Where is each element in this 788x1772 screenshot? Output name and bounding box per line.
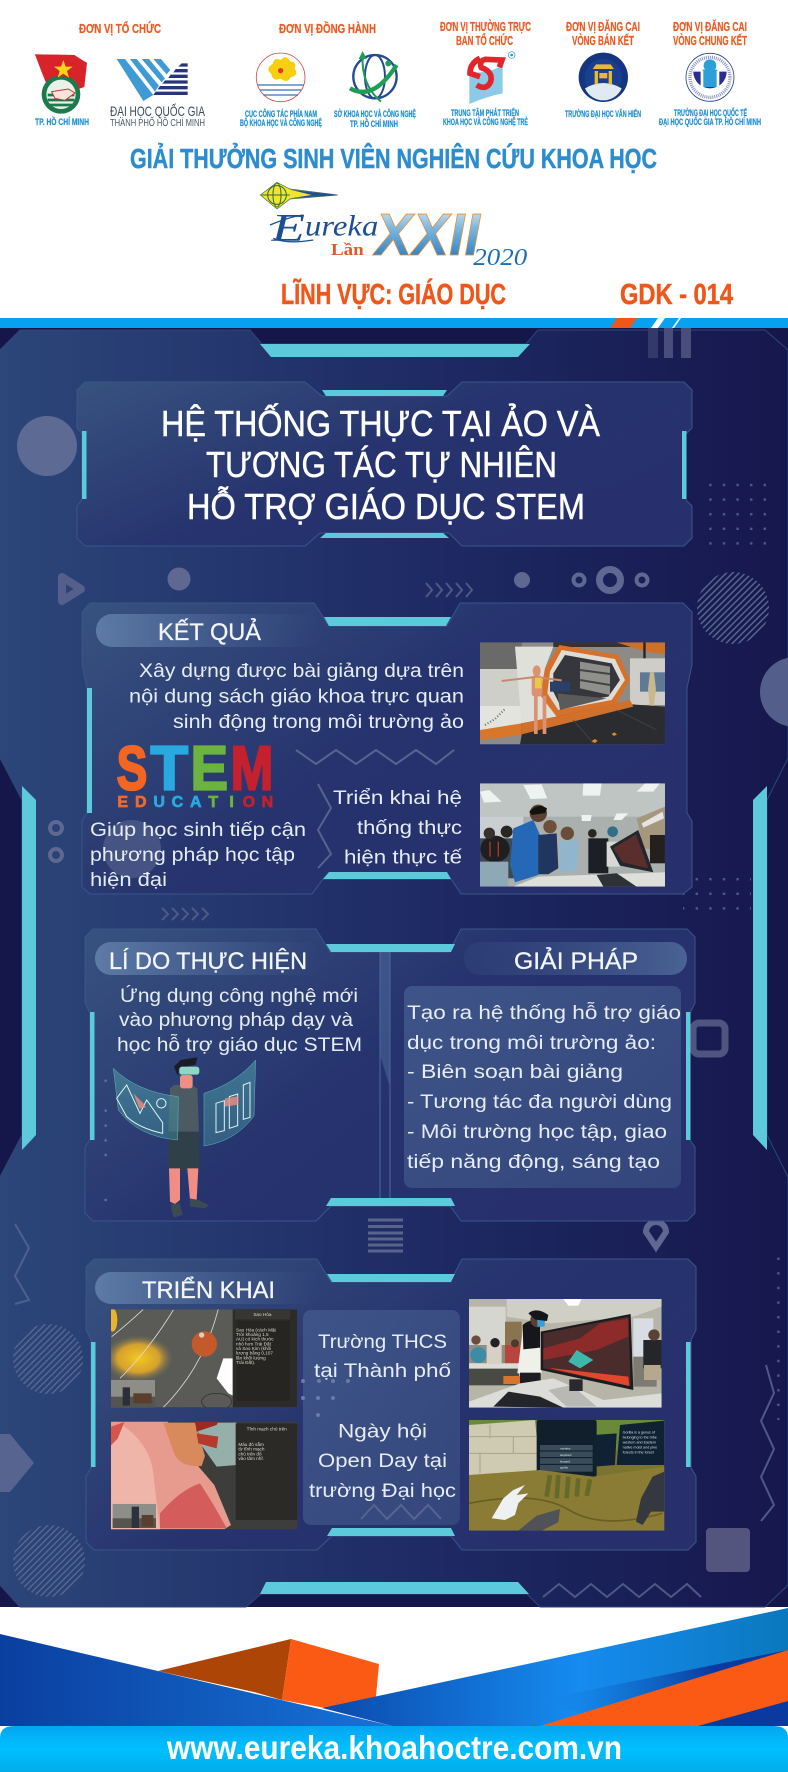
text: lessons: Xây dựng được bài giảng dựa trên xyxy=(139,661,464,682)
photo: AR solar system: và Sao Kim (khối xyxy=(236,1346,271,1351)
text: secondary school: Trường THCS xyxy=(318,1332,447,1353)
text: lessons: nội dung sách giáo khoa trực quan xyxy=(129,686,464,708)
stem education logo: N xyxy=(262,794,273,811)
ribbon: blue right xyxy=(322,1608,788,1726)
heading: organising unit: ĐƠN VỊ TỔ CHỨC xyxy=(79,21,161,36)
box: solution: - Môi trường học tập, giao xyxy=(407,1122,667,1143)
text: open day: trường Đại học xyxy=(309,1481,456,1502)
blue header band xyxy=(0,318,788,328)
logo: international university xyxy=(686,53,734,101)
stem education logo: I xyxy=(229,794,234,811)
photo: AR solar system: AU) có kích thước xyxy=(236,1337,274,1342)
photo: student with headset xyxy=(469,1299,662,1408)
logo: national university xyxy=(117,59,188,101)
heading pill: reason: LÍ DO THỰC HIỆN xyxy=(109,948,307,975)
chevron divider xyxy=(318,784,331,868)
logo: Eureka XXII 2020: E xyxy=(270,205,305,249)
text: reason: Ứng dụng công nghệ mới xyxy=(120,985,358,1007)
photo: AR heart: Tĩnh mạch chủ trên xyxy=(247,1426,287,1432)
logo: youth union xyxy=(35,54,87,114)
label: young science centre: TRUNG TÂM PHÁT TRIỂN xyxy=(451,107,519,118)
photo: AR heart: Máu đỏ sẫm xyxy=(238,1441,264,1447)
panel: reason and solution xyxy=(85,929,695,1221)
heading pill: solution: GIẢI PHÁP xyxy=(514,946,638,975)
text: deployment: Triển khai hệ xyxy=(333,788,462,809)
panel: results xyxy=(82,603,692,894)
photo: AR heart: chủ trên đổ xyxy=(238,1450,262,1456)
label: national university name xyxy=(110,102,205,129)
box: solution xyxy=(404,986,681,1188)
photo: AR heart xyxy=(111,1422,297,1530)
stem education logo: E xyxy=(117,794,128,811)
heading: final host xyxy=(673,19,747,48)
logo: Eureka XXII 2020 xyxy=(260,182,527,271)
heading: semi final host: ĐƠN VỊ ĐĂNG CAI xyxy=(566,19,640,34)
photo: VR jungle lesson: monkey xyxy=(560,1446,571,1450)
ribbon: blue left xyxy=(0,1634,392,1726)
logo: Eureka XXII 2020: ureka xyxy=(305,211,378,243)
logo: Eureka XXII 2020: XXII xyxy=(372,201,481,268)
stem education logo xyxy=(117,734,273,811)
stem education logo: M xyxy=(231,734,273,803)
box: solution: dục trong môi trường ảo: xyxy=(407,1033,656,1054)
heading pill: results xyxy=(96,614,322,647)
text: open day: Ngày hội xyxy=(338,1422,427,1442)
stem education logo: S xyxy=(117,734,147,803)
box: solution: Tạo ra hệ thống hỗ trợ giáo xyxy=(407,1002,681,1024)
title line 1: HỆ THỐNG THỰC TẠI ẢO VÀ xyxy=(161,402,600,444)
logo: young science centre xyxy=(469,52,515,104)
decorative shapes xyxy=(0,328,788,1597)
ribbon: dark fold xyxy=(540,1650,788,1726)
photo: AR solar system: nhỏ hơn Trái Đất xyxy=(236,1340,272,1346)
label: Van Hien university: TRƯỜNG ĐẠI HỌC VĂN HIẾN xyxy=(565,108,641,119)
text: deployment: hiện thực tế xyxy=(344,848,463,868)
photo: VR jungle lesson: Gorilla is a genus of xyxy=(623,1430,656,1434)
photo: AR solar system: lượng bằng 0,107 xyxy=(236,1350,273,1356)
text: students access xyxy=(90,820,306,891)
panel: deployment xyxy=(86,1259,696,1550)
heading pill: results: KẾT QUẢ xyxy=(158,617,261,646)
cyan left bar xyxy=(22,786,36,1150)
website bar xyxy=(0,1726,788,1772)
bottom ribbon graphic xyxy=(0,1608,788,1726)
logo: southern science bureau xyxy=(256,53,305,102)
text: lessons: sinh động trong môi trường ảo xyxy=(173,712,464,733)
label: southern science bureau xyxy=(240,108,322,128)
heading pill: deployment xyxy=(95,1272,322,1304)
label: young science centre xyxy=(443,107,528,127)
heading pill: solution xyxy=(464,942,687,975)
stem education logo: U xyxy=(153,794,165,811)
heading: standing unit: BAN TỔ CHỨC xyxy=(456,33,513,48)
text: students access: hiện đại xyxy=(90,870,167,891)
cyan right bar xyxy=(753,786,767,1150)
photo: VR jungle lesson xyxy=(469,1420,664,1531)
box: solution: - Tương tác đa người dùng xyxy=(407,1092,672,1113)
stem education logo: O xyxy=(243,794,255,811)
photo: AR heart: vào tâm nhĩ. xyxy=(238,1456,264,1461)
cyan top bar xyxy=(260,344,530,357)
label: young science centre: KHOA HỌC VÀ CÔNG NGHỆ TRẺ xyxy=(443,116,528,127)
photo: VR jungle lesson: western and Eastern xyxy=(623,1440,656,1444)
heading: partner unit: ĐƠN VỊ ĐỒNG HÀNH xyxy=(279,21,376,36)
text: reason: học hỗ trợ giáo dục STEM xyxy=(117,1034,362,1056)
stem education logo: T xyxy=(151,734,188,803)
photo: VR jungle lesson: elephant xyxy=(560,1453,572,1457)
panel: title xyxy=(77,382,692,546)
text: secondary school xyxy=(314,1332,452,1382)
photo: VR jungle lesson: leopard xyxy=(560,1460,570,1464)
text: open day xyxy=(309,1422,456,1502)
box: locations xyxy=(301,1310,460,1525)
text: open day: Open Day tại xyxy=(318,1451,447,1472)
photo: AR solar system xyxy=(103,1308,297,1410)
text: secondary school: tại Thành phố xyxy=(314,1361,452,1382)
project code: GDK - 014 xyxy=(620,279,733,311)
photo: AR solar system: lần khối lượng xyxy=(236,1355,266,1360)
heading: semi final host xyxy=(566,19,640,48)
stem education logo: D xyxy=(135,794,147,811)
photo: VR jungle lesson: native moist and pine xyxy=(623,1445,657,1449)
photo: AR heart: từ tĩnh mạch xyxy=(238,1447,265,1452)
heading: semi final host: VÒNG BÁN KẾT xyxy=(572,33,634,48)
photo: students in lab xyxy=(480,783,665,887)
heading pill: deployment: TRIỂN KHAI xyxy=(142,1276,275,1304)
stem education logo: E xyxy=(191,734,228,803)
logo: city science department xyxy=(350,51,397,102)
text: lessons xyxy=(129,661,464,733)
outer frame xyxy=(0,330,788,1607)
header: organisers and logos xyxy=(35,19,761,129)
label: city science department: TP. HỒ CHÍ MINH xyxy=(350,118,398,129)
cyan bottom bar xyxy=(260,1582,529,1594)
label: southern science bureau: CỤC CÔNG TÁC PHÍA NAM xyxy=(245,108,317,119)
heading: standing unit: ĐƠN VỊ THƯỜNG TRỰC xyxy=(440,19,531,34)
ribbon: orange right xyxy=(540,1650,788,1726)
box: solution: - Biên soạn bài giảng xyxy=(407,1062,623,1083)
text: deployment: thống thực xyxy=(357,818,462,839)
label: city science department: SỞ KHOA HỌC VÀ CÔNG NGHỆ xyxy=(334,108,416,119)
photo: VR jungle lesson: gorilla xyxy=(560,1466,568,1470)
stem education logo: A xyxy=(190,794,202,811)
zigzag xyxy=(296,750,454,764)
logo: Van Hien university xyxy=(579,53,628,102)
label: international university xyxy=(659,107,761,127)
ribbon: brown fold xyxy=(158,1639,291,1700)
label: southern science bureau: BỘ KHOA HỌC VÀ CÔNG NGHỆ xyxy=(240,117,322,128)
stem education logo: T xyxy=(208,794,218,811)
photo: AR solar system: Sao Hỏa xyxy=(253,1311,272,1317)
text: students access: phương pháp học tập xyxy=(90,845,295,866)
heading: standing unit xyxy=(440,19,531,48)
text: deployment xyxy=(333,788,463,868)
photo: VR jungle lesson: belonging to the tribe xyxy=(623,1435,657,1439)
illustration: person with VR headset xyxy=(104,1057,256,1218)
photo: AR solar system: Trời khoảng 1,5 xyxy=(236,1332,269,1337)
field label: LĨNH VỰC: GIÁO DỤC xyxy=(281,277,506,311)
photo: VR jungle lesson: forests in the forest xyxy=(623,1450,654,1454)
photo: AR solar system: Sao Hỏa (cách Mặt xyxy=(236,1326,277,1332)
logo: Eureka XXII 2020: 2020 xyxy=(473,245,527,271)
title line 3: HỖ TRỢ GIÁO DỤC STEM xyxy=(187,485,585,527)
label: national university name: THÀNH PHỐ HỒ CHÍ MINH xyxy=(110,115,205,129)
label: TP HCM: TP. HỒ CHÍ MINH xyxy=(35,116,89,127)
text: reason xyxy=(117,985,362,1056)
box: solution: tiếp năng động, sáng tạo xyxy=(407,1152,660,1173)
label: national university name: ĐẠI HỌC QUỐC GIA xyxy=(110,102,205,119)
website bar: www.eureka.khoahoctre.com.vn xyxy=(166,1729,622,1766)
ribbon: orange fold xyxy=(282,1639,379,1717)
label: city science department xyxy=(334,108,416,129)
text: reason: vào phương pháp dạy và xyxy=(119,1010,353,1031)
photo: AR solar system: Trái Đất). xyxy=(236,1360,255,1365)
title line 2: TƯƠNG TÁC TỰ NHIÊN xyxy=(206,444,557,485)
heading: final host: ĐƠN VỊ ĐĂNG CAI xyxy=(673,19,747,34)
logo: Eureka XXII 2020: Lần xyxy=(331,240,364,259)
photo: virtual anatomy lab xyxy=(480,642,665,744)
stem education logo: C xyxy=(172,794,184,811)
text: students access: Giúp học sinh tiếp cận xyxy=(90,820,306,841)
dark main background xyxy=(0,328,788,1607)
